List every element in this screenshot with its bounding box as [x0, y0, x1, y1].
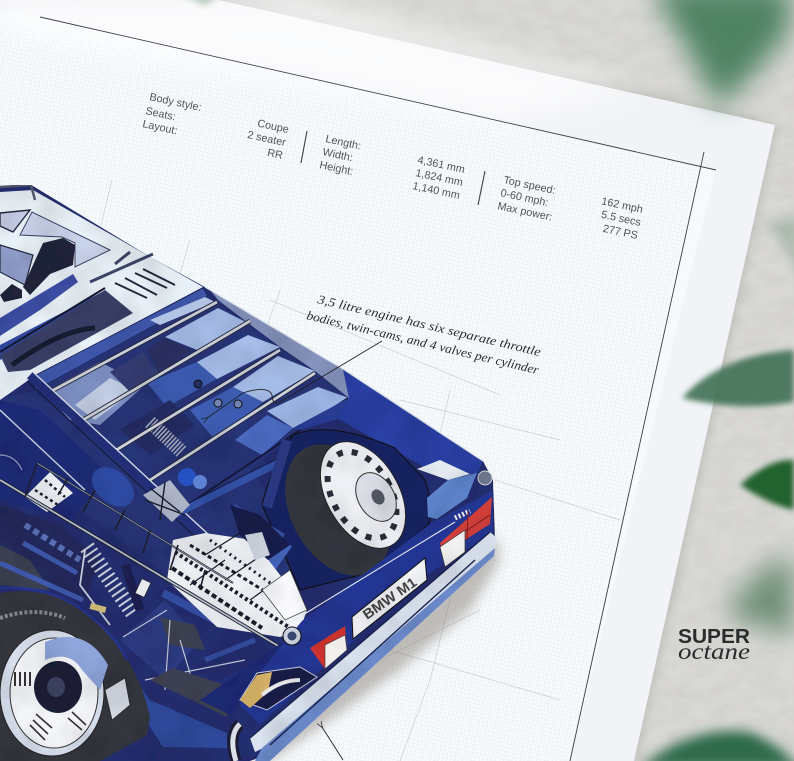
- rear bumper: [250, 532, 496, 761]
- structural beams: [163, 440, 287, 697]
- big tube blob: [84, 459, 142, 515]
- side vent: [115, 269, 175, 298]
- blue pillars: [0, 274, 104, 360]
- spec labels: body: [141, 91, 203, 137]
- engine leader line: [207, 341, 382, 418]
- wheel arch recess: [262, 430, 431, 590]
- spec labels: body: Seats:: [144, 105, 177, 123]
- spare tyre: [264, 426, 412, 594]
- bumper leader arrow: [322, 727, 343, 760]
- spec labels: dimensions: [318, 133, 362, 178]
- car shadow: [250, 535, 500, 761]
- suspension spring: [80, 547, 151, 625]
- fender line: [0, 588, 127, 660]
- road wheel rim: [0, 630, 108, 756]
- ladder frame: [0, 463, 280, 647]
- spoiler hoop: [0, 185, 35, 200]
- spec values: dimensions: 1,140 mm: [411, 180, 461, 202]
- trunk shut line: [293, 522, 455, 621]
- divider: [478, 171, 485, 205]
- Super Octane logo: octane: [678, 639, 750, 664]
- underbody: [150, 668, 240, 717]
- number plate: [352, 558, 427, 639]
- spec values: body: Coupe: [256, 118, 290, 136]
- M1 badge: [455, 511, 470, 518]
- spec values: performance: 162 mph: [600, 195, 644, 216]
- seat cushion window: [0, 245, 33, 285]
- spec labels: dimensions: Width:: [321, 146, 354, 164]
- spec values: dimensions: [411, 154, 466, 202]
- spec values: performance: [600, 195, 644, 242]
- number plate: BMW M1: [360, 574, 420, 622]
- faint construction lines: [95, 180, 620, 761]
- car body silhouette: [0, 186, 495, 761]
- rear fascia navy band: [240, 491, 493, 724]
- rear quarter window: [417, 460, 477, 519]
- engine bay base: [0, 296, 349, 625]
- small white engine block: [25, 472, 73, 512]
- spec labels: performance: Max power:: [496, 200, 553, 224]
- right tail light: [440, 497, 492, 567]
- road wheel tyre: [0, 591, 150, 761]
- blue floor cells: [120, 362, 293, 455]
- roof tube: [90, 252, 153, 282]
- spec labels: dimensions: Height:: [318, 159, 354, 178]
- spec values: body: RR: [266, 147, 284, 162]
- navy rear deck: [338, 369, 483, 475]
- roof and icy rear panel: [0, 190, 203, 400]
- spec labels: body: Body style:: [148, 91, 203, 114]
- spec labels: performance: 0-60 mph:: [499, 187, 549, 209]
- intake spring: [150, 422, 182, 452]
- spec values: body: [246, 118, 290, 162]
- gearbox white detail: [167, 505, 307, 637]
- brake caliper and hub: [105, 678, 130, 720]
- car cutaway illustration: [0, 185, 496, 761]
- spec values: dimensions: 1,824 mm: [414, 167, 464, 189]
- spec labels: performance: Top speed:: [502, 174, 557, 197]
- spec values: performance: 5.5 secs: [600, 209, 642, 229]
- engine annotation: bodies, twin-cams, and 4 valves per cylinder: [305, 308, 540, 377]
- louvre glass panels: [150, 297, 349, 428]
- translucent rear deck: [210, 290, 349, 398]
- spec table: [141, 91, 644, 242]
- spec values: performance: 277 PS: [602, 223, 639, 242]
- engine annotation: 3,5 litre engine has six separate throttle: [315, 292, 543, 359]
- divider: [301, 131, 307, 163]
- Super Octane logo: SUPER: [678, 626, 751, 648]
- gold shock collars: [79, 603, 107, 633]
- left body structure: [0, 400, 110, 520]
- mechanical greys: [143, 468, 207, 522]
- blurred foliage: [175, 0, 794, 761]
- indicator lens: [240, 667, 317, 710]
- spare wheel rim: [303, 427, 423, 563]
- spec labels: performance: [496, 174, 557, 224]
- Super Octane logo: [678, 626, 751, 664]
- spec values: dimensions: 4,361 mm: [416, 154, 466, 176]
- louvre slats: [48, 302, 348, 510]
- corner badge: [283, 471, 492, 645]
- spec labels: body: Layout:: [141, 118, 179, 137]
- blue roof edge: [32, 288, 208, 390]
- main diagonal pillar: [0, 372, 290, 619]
- spec labels: dimensions: Length:: [324, 133, 362, 152]
- left tail light: [310, 626, 347, 669]
- seat: [23, 238, 75, 295]
- dark cell: [147, 338, 190, 375]
- light engine parts: [45, 362, 145, 425]
- dark interior: [0, 288, 133, 372]
- blue skirt: [130, 673, 227, 748]
- spec values: body: 2 seater: [246, 129, 287, 149]
- lower chassis cell: [120, 600, 245, 690]
- exhaust chrome: [233, 724, 240, 761]
- rear window: [20, 212, 110, 267]
